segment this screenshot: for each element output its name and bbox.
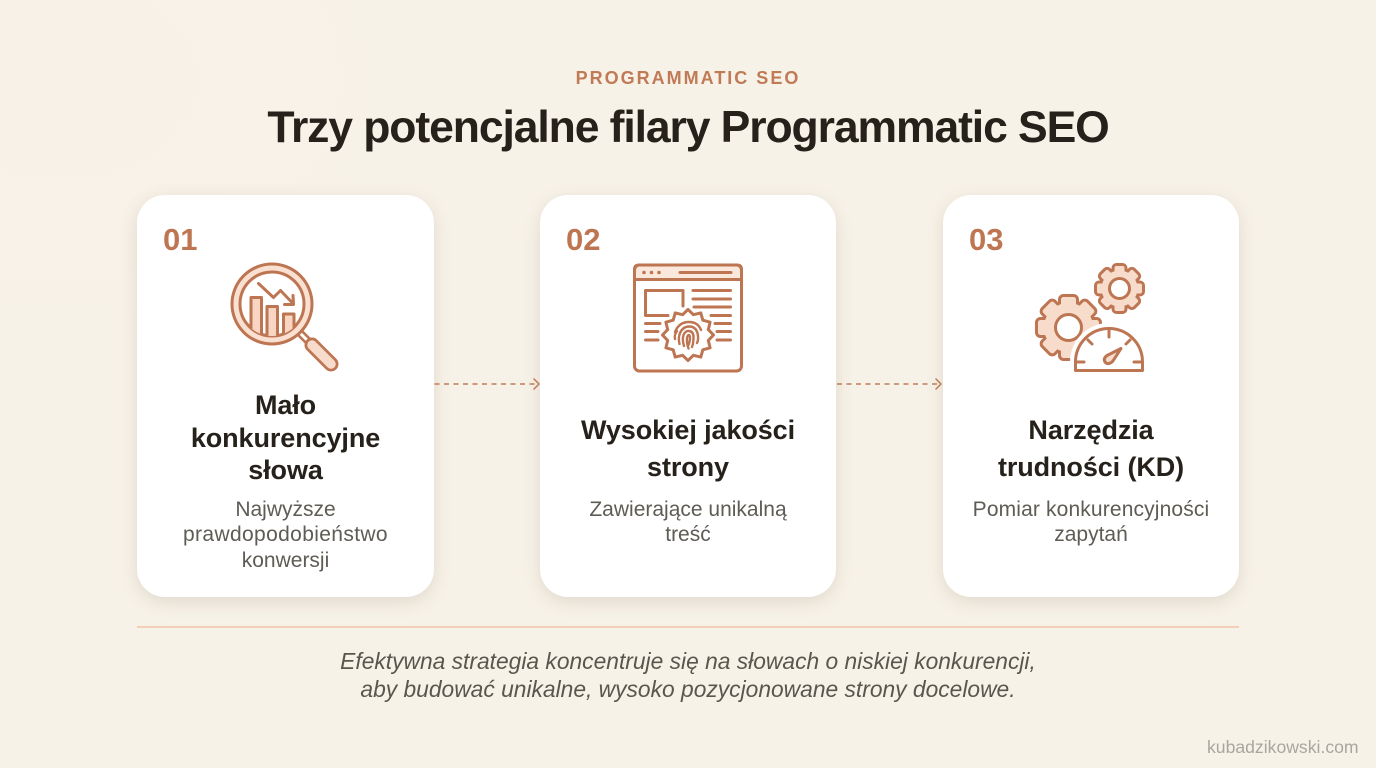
description: card 02: [589, 498, 787, 546]
heading: card 01: słowa: [248, 455, 323, 485]
conclusion text: Efektywna strategia koncentruje się na słowach o niskiej konkurencji,: [340, 648, 1036, 674]
watermark: kubadzikowski.com: [1207, 737, 1359, 757]
number 03: 03: [969, 222, 1003, 257]
heading: card 01: konkurencyjne: [191, 422, 380, 452]
conclusion text: aby budować unikalne, wysoko pozycjonowane strony docelowe.: [360, 676, 1016, 702]
heading: card 02: Wysokiej jakości: [581, 415, 795, 445]
eyebrow label: PROGRAMMATIC SEO: [576, 68, 800, 88]
heading: card 01: [191, 390, 380, 485]
description: card 01: konwersji: [242, 548, 329, 572]
panel: card 02: [540, 195, 836, 597]
conclusion text: [340, 648, 1036, 702]
description: card 01: prawdopodobieństwo: [183, 523, 388, 546]
big gear: [1038, 297, 1099, 358]
description: card 01: [183, 498, 388, 572]
title: Trzy potencjalne filary Programmatic SEO: [267, 103, 1109, 152]
gauge: [1076, 328, 1142, 371]
description: card 01: Najwyższe: [235, 498, 336, 520]
description: card 02: treść: [665, 523, 711, 546]
icon: magnifying glass with falling chart: [232, 264, 331, 364]
description: card 02: Zawierające unikalną: [589, 498, 787, 520]
description: card 03: [973, 498, 1209, 546]
number 01: 01: [163, 222, 197, 257]
description: card 03: zapytań: [1054, 523, 1128, 546]
heading: card 03: [998, 415, 1184, 482]
icon: gears and speed gauge: [1038, 266, 1142, 371]
heading: card 02: strony: [647, 452, 729, 482]
heading: card 02: [581, 415, 795, 482]
arrow: card 2 to card 3: [837, 379, 941, 389]
small gear: [1097, 266, 1142, 311]
arrow: card 1 to card 2: [434, 379, 539, 389]
heading: card 01: Mało: [255, 390, 316, 420]
description: card 03: Pomiar konkurencyjności: [973, 498, 1209, 520]
number 02: 02: [566, 222, 600, 257]
icon: web page with fingerprint badge: [634, 265, 742, 371]
panel: card 01: [137, 195, 434, 597]
heading: card 03: Narzędzia: [1028, 415, 1154, 445]
heading: card 03: trudności (KD): [998, 452, 1184, 482]
panel: card 03: [943, 195, 1239, 597]
